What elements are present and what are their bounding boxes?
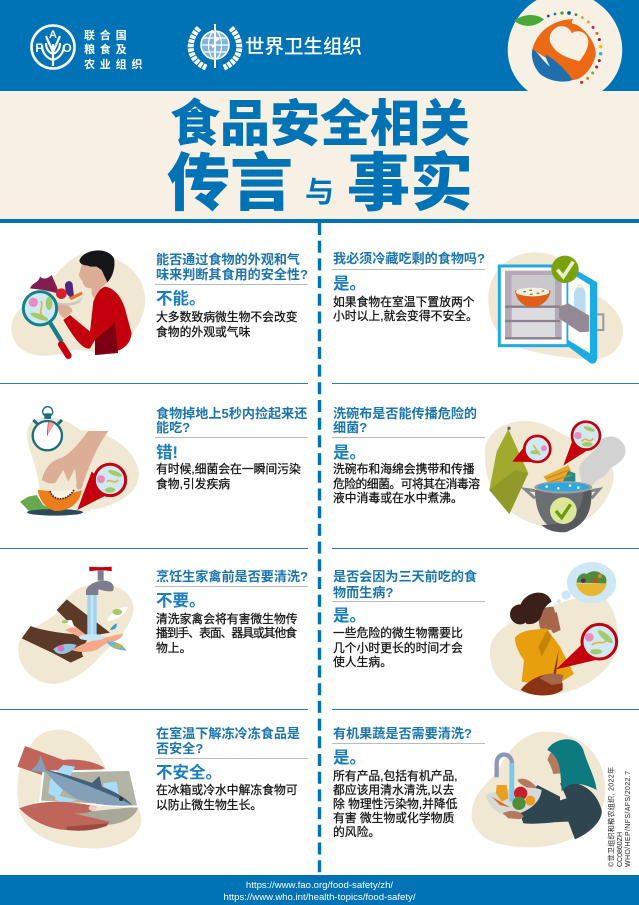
- question: [156, 405, 307, 435]
- explanation: 液中消毒或在水中煮沸。: [333, 491, 463, 505]
- question: 烹饪生家禽前是否要清洗?: [156, 568, 308, 584]
- title line 1: 食品安全相关: [170, 96, 470, 152]
- title line 2: 事实: [347, 149, 473, 219]
- question: [333, 405, 477, 435]
- explanation: [156, 783, 298, 812]
- answer: 不安全。: [156, 762, 222, 782]
- explanation: [156, 612, 298, 655]
- question: 食物掉地上5秒内捡起来还: [156, 405, 307, 421]
- explanation: 所有产品,包括有机产品,: [333, 769, 458, 783]
- question: [333, 568, 477, 600]
- question: 是否会因为三天前吃的食: [333, 568, 477, 584]
- title line 2: 传言: [167, 149, 293, 219]
- illustration: hands washing under a tap: [18, 567, 133, 684]
- question: 否安全?: [156, 740, 203, 756]
- answer: 不能。: [156, 289, 206, 308]
- campaign logo: [508, 0, 622, 91]
- footer with URLs: https://www.who.int/health-topics/food-safety/: [224, 892, 416, 903]
- illustration: open fridge with check mark: [488, 252, 623, 364]
- footer with URLs: https://www.fao.org/food-safety/zh/: [246, 880, 393, 891]
- explanation: [333, 626, 463, 669]
- question: [156, 725, 300, 756]
- explanation: [333, 462, 480, 505]
- answer: 是。: [333, 748, 366, 767]
- WHO emblem: [191, 24, 239, 68]
- illustration: thinking woman: [490, 562, 618, 695]
- illustration: dishcloth, sponge and boiling pot: [485, 421, 626, 532]
- answer: 错!: [156, 443, 178, 462]
- WHO name: 世界卫生组织: [245, 36, 362, 58]
- explanation: 洗碗布和海绵会携带和传播: [333, 462, 475, 476]
- question: 味来判断其食用的安全性?: [156, 266, 308, 282]
- explanation: 除 物理性污染物,并降低: [333, 797, 458, 811]
- illustration: man smelling food with magnifier: [11, 250, 145, 356]
- explanation: 清洗家禽会将有害微生物传: [156, 612, 298, 626]
- answer: 不要。: [156, 592, 206, 610]
- FAO logo: F: [35, 41, 43, 55]
- credits: vertical reference codes: ©世卫组织和粮农组织, 2022年: [606, 767, 616, 867]
- illustration: stopwatch, hand and papaya: [20, 407, 139, 516]
- FAO logo: O: [62, 41, 72, 55]
- illustration: woman washing vegetables: [472, 732, 605, 847]
- explanation: 在冰箱或冷水中解冻食物可: [156, 783, 298, 797]
- explanation: 食物,引发疾病: [156, 477, 230, 491]
- explanation: [156, 462, 301, 491]
- FAO name: 粮食及: [84, 42, 131, 56]
- title line 2: [167, 149, 473, 219]
- explanation: 小时以上,就会变得不安全。: [333, 309, 478, 323]
- question: 能吃?: [156, 419, 190, 435]
- explanation: 一些危险的微生物需要比: [333, 626, 463, 640]
- explanation: 使人生病。: [333, 655, 392, 669]
- FAO name: [84, 28, 147, 71]
- explanation: 大多数致病微生物不会改变: [156, 310, 298, 324]
- explanation: 物上。: [156, 641, 191, 655]
- question: 物而生病?: [333, 584, 393, 600]
- question: [156, 251, 308, 282]
- question: 有机果蔬是否需要清洗?: [333, 725, 472, 741]
- explanation: 危险的细菌。可将其在消毒溶: [333, 477, 480, 491]
- explanation: 播到手、表面、器具或其他食: [156, 626, 297, 640]
- header band: [0, 0, 639, 91]
- explanation: 有时候,细菌会在一瞬间污染: [156, 462, 301, 476]
- explanation: 的风险。: [333, 825, 380, 839]
- FAO name: 农业组织: [84, 57, 147, 71]
- question: 洗碗布是否能传播危险的: [333, 405, 477, 421]
- explanation: 以防止微生物生长。: [156, 798, 262, 812]
- panel: washing organic produce: [332, 725, 605, 847]
- title band: [0, 91, 639, 219]
- credits: vertical reference codes: WHO/HEP/NFS/AFS/2022.7: [625, 771, 632, 867]
- explanation: [156, 310, 298, 339]
- credits: vertical reference codes: CC0860ZH: [617, 832, 624, 867]
- title line 2: 与: [305, 176, 334, 209]
- illustration: hands holding tray with fish: [17, 730, 142, 848]
- explanation: 几个小时更长的时间才会: [333, 641, 463, 655]
- FAO logo: [32, 26, 74, 68]
- answer: 是。: [333, 606, 366, 625]
- panel: five second rule: [20, 405, 308, 516]
- panel: judge by look and smell: [11, 250, 308, 356]
- explanation: 有害 微生物或化学物质: [333, 811, 454, 825]
- explanation: [333, 769, 458, 839]
- explanation: 如果食物在室温下置放两个: [333, 295, 475, 309]
- panel: refrigerate leftovers: [332, 250, 623, 364]
- question: 在室温下解冻冷冻食品是: [156, 725, 300, 741]
- question: 细菌?: [333, 420, 367, 435]
- explanation: 食物的外观或气味: [156, 325, 251, 339]
- panel: food eaten three days ago: [332, 562, 618, 695]
- panel: dishcloths: [332, 405, 626, 532]
- footer with URLs: [0, 875, 639, 905]
- question: 能否通过食物的外观和气: [156, 251, 300, 267]
- FAO logo: A: [49, 29, 57, 41]
- FAO name: 联合国: [84, 28, 131, 42]
- answer: 是。: [333, 274, 366, 293]
- answer: 是。: [333, 443, 366, 462]
- credits: vertical reference codes: [606, 767, 632, 867]
- explanation: 都应该用清水清洗,以去: [333, 783, 454, 797]
- panel: thawing frozen food: [17, 725, 308, 848]
- panel: washing poultry: [18, 567, 308, 684]
- explanation: [333, 295, 478, 323]
- question: 我必须冷藏吃剩的食物吗?: [333, 250, 485, 266]
